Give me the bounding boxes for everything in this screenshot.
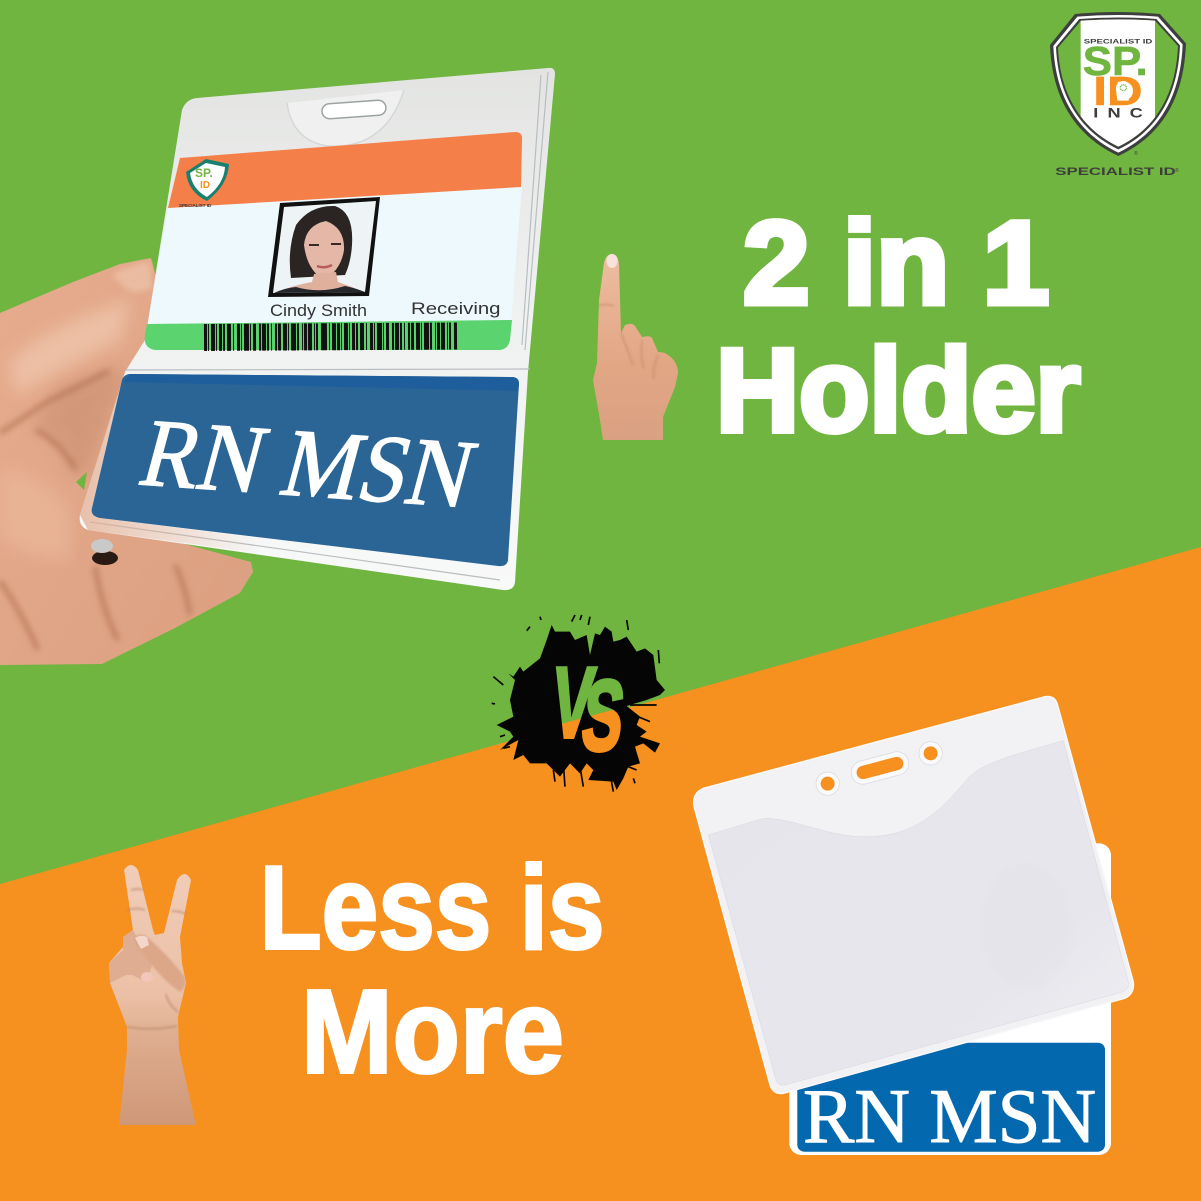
lanyard slot [849, 749, 911, 787]
logo top text: SPECIALIST ID [1084, 37, 1152, 45]
logo INC: INC [1093, 105, 1152, 121]
heading line one: 2 in 1 [743, 197, 1049, 330]
green stripe [145, 320, 512, 350]
ink splat [492, 615, 665, 792]
RN MSN text: RN MSN [130, 400, 486, 529]
curled fingers [109, 930, 152, 983]
ID card [145, 132, 522, 350]
thumb [134, 935, 185, 992]
registered mark: ® [1134, 150, 1138, 157]
left hole [816, 772, 839, 795]
heading line two: Holder [716, 325, 1080, 456]
clear holder [76, 68, 555, 590]
blue band [797, 1043, 1105, 1152]
card text: RN MSN [803, 1073, 1096, 1159]
logo ID: ID [1093, 68, 1142, 114]
logo SP.: SP. [1083, 38, 1148, 84]
card white body [145, 186, 522, 350]
ring [91, 539, 118, 565]
shield [1050, 12, 1186, 156]
RN MSN card [789, 843, 1111, 1159]
card logo: SPECIALIST ID [179, 203, 212, 208]
clear holder [694, 696, 1134, 1094]
skin seen through holder rim [80, 372, 260, 553]
right hole [919, 742, 942, 765]
barcode [204, 336, 457, 338]
card logo: ID [200, 180, 210, 191]
heading line two: More [301, 966, 564, 1098]
icon: pointing finger [593, 254, 678, 440]
heading line one: Less is [260, 842, 604, 974]
portrait photo [268, 197, 380, 297]
orange diagonal panel [0, 547, 1201, 1201]
VS lettering: V [547, 646, 599, 759]
white card [789, 843, 1111, 1155]
wordmark registered mark: ® [1175, 167, 1179, 174]
photo: hand holding 2 in 1 badge holder [0, 68, 555, 665]
photo: standard badge holder with RN MSN card [694, 696, 1134, 1159]
heading: 2 in 1 Holder [716, 197, 1080, 456]
icon: peace sign hand [109, 865, 196, 1125]
holder pocket [708, 741, 1129, 1085]
logo head icon [1116, 81, 1133, 101]
VS lettering: S [577, 659, 630, 772]
pocket sheen [980, 863, 1073, 990]
VS badge [492, 615, 665, 792]
holder slot tab [287, 90, 404, 146]
orange band [168, 132, 522, 208]
logo wordmark: SPECIALIST ID [1055, 165, 1176, 177]
card logo [179, 159, 229, 208]
department: Receiving [411, 299, 501, 318]
heading: Less is More [260, 842, 604, 1098]
card logo: SP. [195, 166, 213, 180]
name: Cindy Smith [270, 300, 367, 320]
hand [0, 258, 253, 665]
specialist id logo [1050, 12, 1186, 177]
gap in hand [76, 472, 87, 490]
blue RN MSN insert [92, 374, 519, 566]
